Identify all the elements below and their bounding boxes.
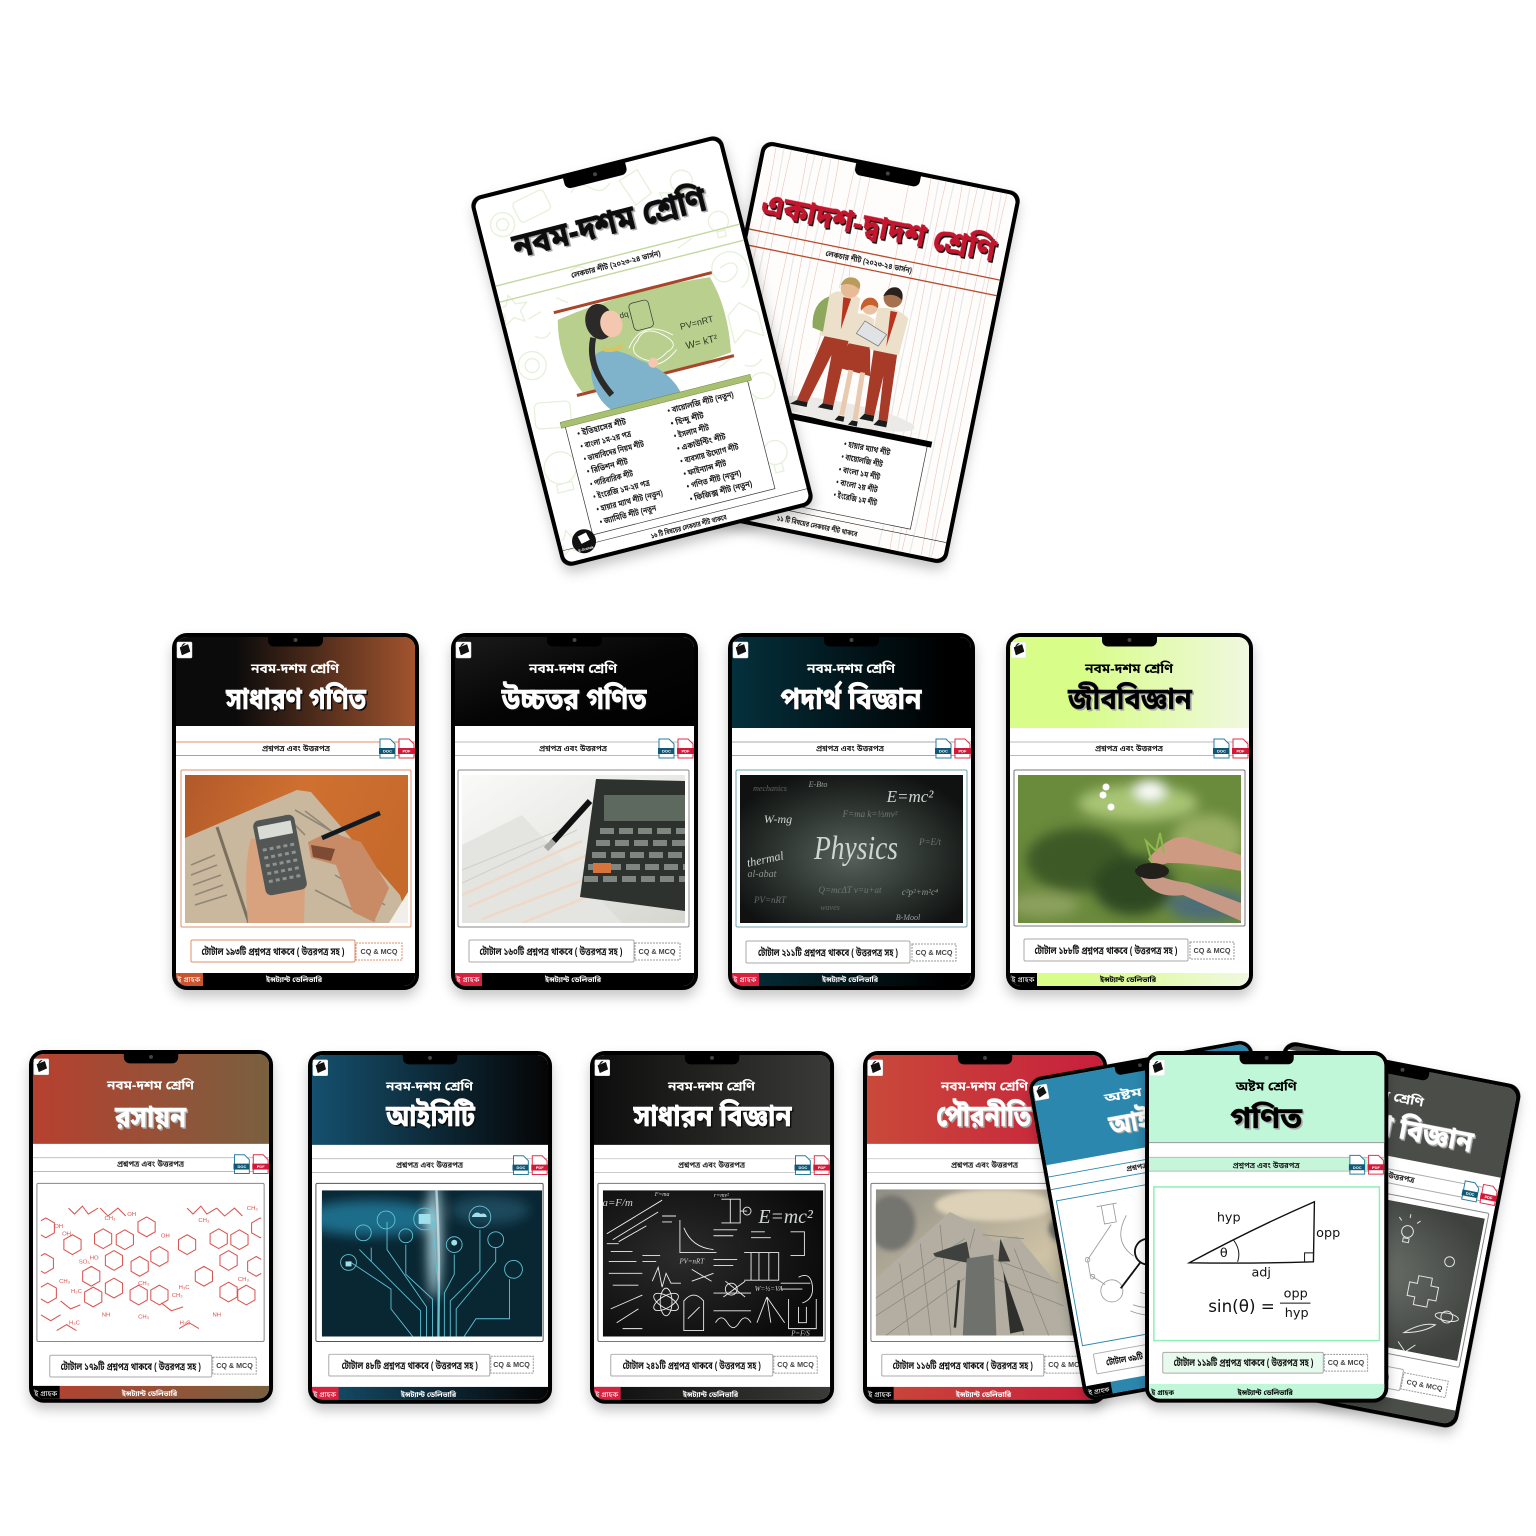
photo: physics chalkboard: F=ma k=½mv² [842,809,898,819]
brand tag: ই গ্রাহক [732,976,757,984]
photo: chemical structures: H₃C [180,1321,191,1327]
photo: physics chalkboard: PV=nRT [753,895,787,905]
photo: chemical structures: OH [62,1232,71,1238]
band text: প্রশ্নপত্র এবং উত্তরপত্র [678,1161,746,1170]
tag: CQ and MCQ: CQ & MCQ [1194,948,1231,955]
illustration: teacher at chalkboard [554,271,734,410]
photo: chemical structures: SO₃ [79,1259,90,1265]
photo: chemical structures: NH [102,1313,110,1319]
delivery text: ইন্সট্যান্ট ডেলিভারি [1237,1389,1294,1397]
header band [33,1054,269,1144]
panel: subject list: • বাংলা ২য় শীট [835,477,879,495]
class label: নবম-দশম শ্রেণি [940,1079,1029,1094]
photo: chemical structures: CH₃ [238,1277,249,1283]
subject title: পৌরনীতি [936,1098,1032,1133]
tag: CQ and MCQ: CQ & MCQ [493,1362,530,1369]
panel: subject list: • বাংলা ১ম-২য় পত্র [579,429,632,451]
pill: total: টোটাল ২১১টি প্রশ্নপত্র থাকবে ( উত্তরপত্র সহ ) [758,947,898,959]
photo: desk calculator [462,775,685,923]
pill: total [469,940,634,962]
brand tag: ই গ্রাহক [1087,1385,1111,1397]
footer note: ১১ টি বিষয়ের লেকচার শীট থাকবে [776,512,859,539]
delivery text: ইন্সট্যান্ট ডেলিভারি [265,975,323,984]
brand tag: ই গ্রাহক [1010,976,1035,984]
header band [312,1055,548,1145]
photo: chemical structures: OH [161,1234,170,1240]
panel: trigonometry diagram: sin(θ) = [1208,1296,1275,1316]
tag background [732,973,759,986]
tag background [867,1387,894,1400]
pill: total: টোটাল ১২৮টি প্রশ্নপত্র থাকবে ( উত্তরপত্র সহ ) [1253,1347,1390,1384]
panel: subject list: • ইতিহাসের শীট [576,416,627,438]
card: chemistry [29,1050,273,1403]
tag: CQ and MCQ [912,944,956,961]
pill: total [50,1355,212,1377]
photo: chemical structures: CH₃ [138,1281,150,1287]
footer strip [1086,1347,1305,1398]
photo: chemical structures: CH₃ [138,1315,150,1321]
class label: নবম-দশম শ্রেণি [106,1078,195,1093]
class label: নবম-দশম শ্রেণি [1084,661,1173,676]
subject title: সাধারণ বিজ্ঞান [1307,1093,1477,1159]
panel: subject list: • একাউন্টিং শীট [676,431,727,453]
tag background [1086,1382,1113,1398]
footer strip [176,973,415,986]
panel: subject list: • ফিজিক্স শীট [758,478,799,496]
card: biology [1006,633,1253,990]
photo: chemical structures: HO [90,1255,99,1261]
class label: নবম-দশম শ্রেণি [528,661,617,676]
band text: প্রশ্নপত্র এবং উত্তরপত্র [1348,1163,1416,1185]
icon: round logo [569,527,599,556]
panel: trigonometry diagram: opp [1284,1286,1308,1301]
tag: CQ and MCQ [491,1356,533,1373]
footer strip [312,1387,548,1400]
pill: total [329,1354,490,1376]
format labels [1465,1191,1493,1201]
panel: subject list: • বায়োলজি শীট [841,451,884,469]
tag: CQ and MCQ [213,1357,256,1374]
subject title: উচ্চতর গণিত [501,681,647,716]
header band [732,637,971,728]
photo: chemical structures: H₃C [179,1285,190,1291]
footer note: ১৬ টি বিষয়ের লেকচার শীট থাকবে [649,512,728,541]
panel: subject list: • জ্যামিতি শীট (নতুন [598,503,658,527]
photo: physics chalkboard [740,775,963,923]
photo: parliament building [868,1189,1108,1338]
format labels: PDF [818,1165,826,1170]
brand tag: ই গ্রাহক [594,1391,619,1399]
card: higher math [451,633,698,990]
pill: total [1093,1327,1246,1374]
photo: science chalkboard [603,1190,823,1338]
card: class 8 math (front) [1145,1051,1388,1403]
header band [594,1055,830,1145]
format labels: DOC [238,1164,246,1169]
pill: total [1241,1339,1404,1391]
subject title: আইসিটি [385,1098,475,1133]
photo: chemical structures: CH₃ [247,1206,258,1212]
format labels: DOC [383,749,392,754]
pill: total [1024,939,1188,961]
footer strip [732,973,971,986]
photo: science chalkboard: a=F/m [603,1197,633,1209]
photo frame [316,1183,543,1341]
panel: trigonometry diagram: θ [1220,1246,1228,1261]
header band [176,637,415,726]
photo: chemical structures: CH₃ [172,1293,183,1299]
pill: total [611,1354,773,1376]
format labels [238,1164,265,1169]
panel: trigonometry diagram: opp [1316,1226,1340,1241]
pill: total: টোটাল ৪৮টি প্রশ্নপত্র থাকবে ( উত্তরপত্র সহ ) [342,1360,478,1372]
photo: chemical structures: CH₃ [105,1216,116,1222]
class label: অষ্টম শ্রেণি [1358,1082,1426,1110]
photo: physics chalkboard: Q=mcΔT v=u+at [818,885,882,895]
card: physics [728,633,975,990]
pill: total: টোটাল ১১৯টি প্রশ্নপত্র থাকবে ( উত্তরপত্র সহ ) [1174,1357,1313,1369]
tag: CQ and MCQ [1190,942,1234,959]
photo: hands with seedling [1007,775,1248,923]
pill: total: টোটাল ১১৬টি প্রশ্নপত্র থাকবে ( উত্তরপত্র সহ ) [893,1360,1033,1372]
band text: প্রশ্নপত্র এবং উত্তরপত্র [1095,744,1163,753]
format labels: PDF [1236,749,1245,754]
heading: class 11-12: একাদশ-দ্বাদশ শ্রেণি [759,186,1000,268]
photo: chemical structures: CH₃ [198,1218,210,1224]
brand tag: ই গ্রাহক [1150,1389,1174,1397]
format labels: PDF [402,749,411,754]
brand tag: ই গ্রাহক [33,1390,58,1398]
sub heading: লেকচার শীট (২০২৩-২৪ ভার্সন) [570,248,662,280]
panel: subject list: • ফিজিক্স শীট (নতুন) [689,478,753,505]
card: class 8 ICT (tilted left) [1027,1039,1309,1402]
format labels [1217,749,1245,754]
pill: total: টোটাল ১৯৩টি প্রশ্নপত্র থাকবে ( উত্তরপত্র সহ ) [202,946,344,958]
band text: প্রশ্নপত্র এবং উত্তরপত্র [117,1160,185,1169]
footer strip [594,1387,830,1400]
tag: CQ and MCQ: CQ & MCQ [777,1362,814,1369]
heading: class 9-10: নবম-দশম শ্রেণি [508,178,711,266]
photo: physics chalkboard: E=mc² [886,787,934,806]
photo: science chalkboard: r=mv² [714,1193,729,1199]
subject title: পদার্থ বিজ্ঞান [780,681,922,716]
delivery text: ইন্সট্যান্ট ডেলিভারি [544,975,602,984]
doodle pattern [490,169,788,556]
photo: chemical structures: OH [127,1212,136,1218]
tag: CQ and MCQ [1324,1354,1368,1371]
photo frame [1238,1170,1489,1367]
photo: chemical structures [36,1206,269,1331]
photo: physics chalkboard: Physics [813,830,898,867]
format labels: PDF [682,749,690,754]
photo: science chalkboard: W=½=VA [755,1286,784,1293]
band text: প্রশ্নপত্র এবং উত্তরপত্র [951,1161,1019,1170]
photo: physics chalkboard: waves [820,903,840,912]
panel: trigonometry diagram: adj [1251,1266,1271,1281]
pill: total: টোটাল ১৬০টি প্রশ্নপত্র থাকবে ( উত্তরপত্র সহ ) [480,946,622,958]
illustration: teacher at chalkboard: W= kT² [685,333,720,352]
card: general math [172,633,419,990]
delivery text: ইন্সট্যান্ট ডেলিভারি [121,1390,178,1398]
footer strip [455,973,694,986]
photo: physics chalkboard: W-mg [764,812,792,826]
illustration: teacher at chalkboard: J= dq [608,309,629,323]
photo: chemical structures: H₃C [69,1321,81,1327]
sub heading: লেকচার শীট (২০২৩-২৪ ভার্সন) [825,248,913,275]
icon: round logo: E-Grahak [578,545,594,553]
photo: physics chalkboard: c²p²+m²c⁴ [902,887,938,897]
photo: circuit technology [322,1190,542,1336]
header band [1271,1045,1518,1178]
panel: subject list: • ইসলাম শীট [673,422,710,441]
card: general science [590,1051,834,1404]
panel: subject list: • ফাইন্যান্স শীট [682,458,728,479]
photo: chemical structures: OH [54,1224,63,1230]
band text: প্রশ্নপত্র এবং উত্তরপত্র [539,744,607,753]
band text: প্রশ্নপত্র এবং উত্তরপত্র [396,1161,464,1170]
pill: total: টোটাল ৩৯টি প্রশ্নপত্র থাকবে ( উত্তরপত্র সহ ) [1105,1334,1234,1368]
panel: subject list: • গণিত শীট (নতুন) [685,468,742,492]
photo: calculator on book [185,775,408,923]
drawing: microscope and magnifier [1076,1195,1181,1326]
tag: CQ and MCQ [635,943,680,960]
brand tag: ই গ্রাহক [176,976,201,984]
format labels [799,1165,826,1170]
delivery text: ইন্সট্যান্ট ডেলিভারি [821,975,879,984]
header band [867,1055,1103,1144]
photo: chemical structures: NH [212,1313,221,1319]
brand tag: ই গ্রাহক [455,976,480,984]
format labels: DOC [799,1165,807,1170]
card: class 8 science (tilted right) [1218,1040,1523,1430]
footer strip [33,1386,269,1399]
delivery text: ইন্সট্যান্ট ডেলিভারি [955,1391,1012,1399]
photo: physics chalkboard: B-Mool [896,913,921,922]
panel: subject list: • রিভিশন শীট [586,456,629,476]
photo: science chalkboard: PV=nRT [678,1258,705,1265]
delivery text: ইন্সট্যান্ট ডেলিভারি [1099,975,1157,984]
format labels: PDF [1484,1194,1493,1201]
pill: total [746,941,910,963]
panel: subject list: • ইংরেজি ১ম শীট [833,489,878,508]
pill: total: টোটাল ১৭৯টি প্রশ্নপত্র থাকবে ( উত্তরপত্র সহ ) [61,1361,201,1373]
brand tag: ই গ্রাহক [867,1391,892,1399]
pill: total [1163,1352,1323,1373]
tag: CQ and MCQ: CQ & MCQ [916,950,953,957]
panel: subject list: • হায়ার ম্যাথ শীট (নতুন) [595,488,664,515]
tag: CQ and MCQ: CQ & MCQ [1406,1379,1444,1393]
photo: physics chalkboard: E-Bto [808,780,827,789]
panel: subject list [792,413,932,530]
subject title: সাধারন বিজ্ঞান [633,1098,792,1133]
photo frame [37,1183,264,1341]
format labels: DOC [1353,1165,1362,1170]
pill: total: টোটাল ২৪১টি প্রশ্নপত্র থাকবে ( উত্তরপত্র সহ ) [623,1360,761,1372]
card: ICT [302,1051,552,1404]
panel: trigonometry diagram: hyp [1285,1306,1309,1321]
panel: trigonometry diagram: hyp [1217,1210,1241,1225]
tag: CQ and MCQ [356,943,402,960]
footer strip [1223,1366,1456,1425]
footer strip [1010,973,1249,986]
photo frame [598,1183,825,1341]
tag: CQ and MCQ [1401,1373,1448,1398]
photo: physics chalkboard: al-abat [748,869,777,880]
format labels: DOC [662,749,671,754]
photo: chemical structures: H₃C [71,1289,83,1295]
brand tag: ই গ্রাহক [312,1391,337,1399]
cover: class 9-10 lecture sheet [467,134,815,569]
panel: subject list: • বাংলা ১ম শীট [838,464,881,482]
photo: chemical structures: CH₃ [59,1279,71,1285]
illustration: teacher at chalkboard: PV=nRT [679,314,715,332]
format labels [662,749,690,754]
class label: অষ্টম শ্রেণি [1235,1078,1297,1093]
subject title: গণিত [1230,1100,1303,1135]
class label: নবম-দশম শ্রেণি [667,1079,756,1094]
band background [1149,1157,1384,1171]
tag background [176,973,203,986]
photo: science chalkboard: F=ma [654,1192,670,1198]
cover: class 11-12 lecture sheet [687,140,1022,565]
class label: নবম-দশম শ্রেণি [385,1079,474,1094]
photo frame [1014,770,1245,926]
tag background [455,973,482,986]
photo: physics chalkboard: P=E/t [918,837,942,847]
format labels: PDF [958,749,967,754]
photo frame [1056,1163,1291,1346]
tag: CQ and MCQ: CQ & MCQ [638,949,676,956]
tag: CQ and MCQ: CQ & MCQ [1048,1362,1085,1369]
photo frame [181,770,411,927]
footer strip [1149,1384,1384,1399]
format labels: PDF [257,1164,265,1169]
photo: physics chalkboard: mechanics [753,784,787,793]
photo: science chalkboard: E=mc² [757,1206,814,1228]
panel: subject list: • পারিবারিক শীট [589,468,634,489]
subject title: রসায়ন [114,1101,187,1134]
header band [455,637,694,726]
photo: science doodles [1243,1177,1485,1361]
illustration: three students [788,277,914,432]
photo frame [736,770,967,927]
format labels: PDF [1372,1165,1381,1170]
delivery text: ইন্সট্যান্ট ডেলিভারি [400,1391,457,1399]
band text: প্রশ্নপত্র এবং উত্তরপত্র [1126,1153,1190,1173]
subject title: আইসিটি [1105,1095,1194,1141]
photo frame [871,1183,1098,1341]
format labels: DOC [517,1165,525,1170]
class label: নবম-দশম শ্রেণি [250,661,339,676]
class label: অষ্টম শ্রেণি [1101,1076,1185,1106]
subject title: জীববিজ্ঞান [1067,681,1192,716]
tag background [33,1386,60,1399]
card: civics [863,1051,1108,1404]
format labels [517,1165,544,1170]
tag: CQ and MCQ: CQ & MCQ [1328,1360,1365,1367]
tag: CQ and MCQ [1045,1356,1088,1373]
tag: CQ and MCQ: CQ & MCQ [216,1363,253,1370]
panel: subject list: • ভাষাবিদের নিয়ম শীট [582,439,645,464]
pill: total: টোটাল ১৮৮টি প্রশ্নপত্র থাকবে ( উত্তরপত্র সহ ) [1034,945,1178,957]
panel: trigonometry diagram [1154,1187,1379,1341]
format labels: PDF [536,1165,544,1170]
footer strip [867,1387,1103,1400]
band text: প্রশ্নপত্র এবং উত্তরপত্র [262,744,330,753]
panel: subject list [560,374,779,536]
band text: প্রশ্নপত্র এবং উত্তরপত্র [1233,1161,1300,1170]
format labels [939,749,967,754]
panel: subject list: • ব্যবসায় উদ্যোগ শীট [679,441,740,466]
header band [1149,1055,1384,1143]
subject title: সাধারণ গণিত [225,681,367,716]
panel: subject list: • ইংরেজি ১ম-২য় পত্র [592,477,651,501]
header band [1031,1043,1263,1165]
pill: total [882,1354,1044,1376]
panel: subject list: • হিন্দু শীট [669,410,705,428]
photo: science chalkboard: P=F/S [790,1331,810,1338]
header band [1010,637,1249,728]
pill: total [191,940,355,962]
format labels [1353,1165,1381,1170]
photo: physics chalkboard: thermal [745,848,786,870]
format labels [383,749,411,754]
tag background [1010,973,1037,986]
tag background [594,1387,621,1400]
format labels: DOC [1465,1191,1475,1197]
tag background [312,1387,339,1400]
panel: subject list: • হায়ার ম্যাথ শীট [843,438,891,458]
tag: CQ and MCQ: CQ & MCQ [360,949,398,956]
format labels: DOC [1217,749,1226,754]
photo frame [458,770,689,927]
band text: প্রশ্নপত্র এবং উত্তরপত্র [816,744,884,753]
tag: CQ and MCQ [774,1356,817,1373]
panel: subject list: • বায়োলজি শীট (নতুন) [666,389,735,416]
delivery text: ইন্সট্যান্ট ডেলিভারি [682,1391,739,1399]
class label: নবম-দশম শ্রেণি [806,661,895,676]
format labels: DOC [939,749,948,754]
